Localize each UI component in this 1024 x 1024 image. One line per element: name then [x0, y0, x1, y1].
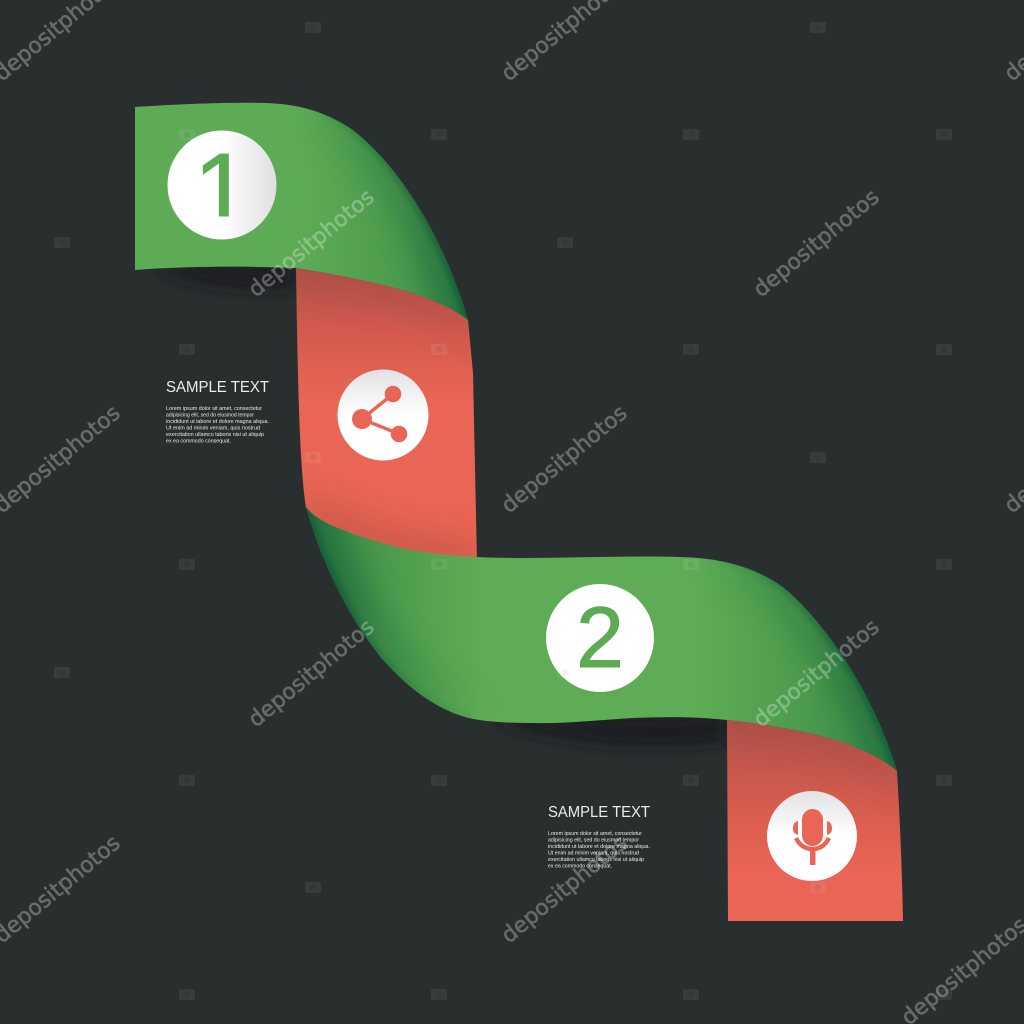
body text: Ut enim ad minim veniam, quis nostrud — [166, 426, 260, 432]
body text — [548, 831, 650, 870]
icon: number two badge: 2 — [576, 590, 624, 686]
body text: Lorem ipsum dolor sit amet, consectetur — [166, 406, 262, 412]
icon: microphone — [767, 791, 857, 881]
icon: share — [338, 370, 428, 460]
shadow under first green band — [150, 266, 296, 289]
text block: right caption — [548, 804, 651, 870]
watermark: depositphotos text: depositphotos — [497, 831, 632, 949]
watermark: depositphotos text: depositphotos — [749, 615, 884, 733]
heading: SAMPLE TEXT — [548, 804, 651, 821]
body text: ex ea commodo consequat. — [548, 864, 612, 870]
watermark: depositphotos text: depositphotos — [244, 185, 379, 303]
body text: incididunt ut labore et dolore magna aliqua. — [548, 844, 650, 850]
panel: red ribbon segment one — [290, 268, 480, 562]
body text: exercitation ullamco laboris nisi ut aliquip — [548, 857, 644, 863]
panel: green ribbon band one — [135, 102, 468, 320]
body text: exercitation ullamco laboris nisi ut aliquip — [166, 432, 264, 438]
text block: left caption — [166, 379, 270, 444]
body text: Lorem ipsum dolor sit amet, consectetur — [548, 831, 642, 837]
panel: green ribbon band two — [306, 507, 897, 771]
watermark: depositphotos text: depositphotos — [244, 615, 379, 733]
heading: SAMPLE TEXT — [166, 379, 270, 396]
body text: Ut enim ad minim veniam, quis nostrud — [548, 850, 639, 856]
body text: adipisicing elit, sed do eiusmod tempor — [166, 412, 254, 418]
icon: number one badge: 1 — [193, 132, 251, 247]
body text: adipisicing elit, sed do eiusmod tempor — [548, 838, 639, 844]
shadow under second green band — [490, 716, 727, 747]
watermark: depositphotos text: depositphotos — [497, 401, 632, 519]
panel: red ribbon segment two — [720, 718, 905, 921]
icon: number one badge — [168, 130, 276, 247]
body text: incididunt ut labore et dolore magna aliqua. — [166, 419, 269, 425]
body text — [166, 406, 269, 444]
watermark: depositphotos text: depositphotos — [749, 185, 884, 303]
icon: number two badge — [546, 584, 654, 692]
body text: ex ea commodo consequat. — [166, 438, 231, 444]
